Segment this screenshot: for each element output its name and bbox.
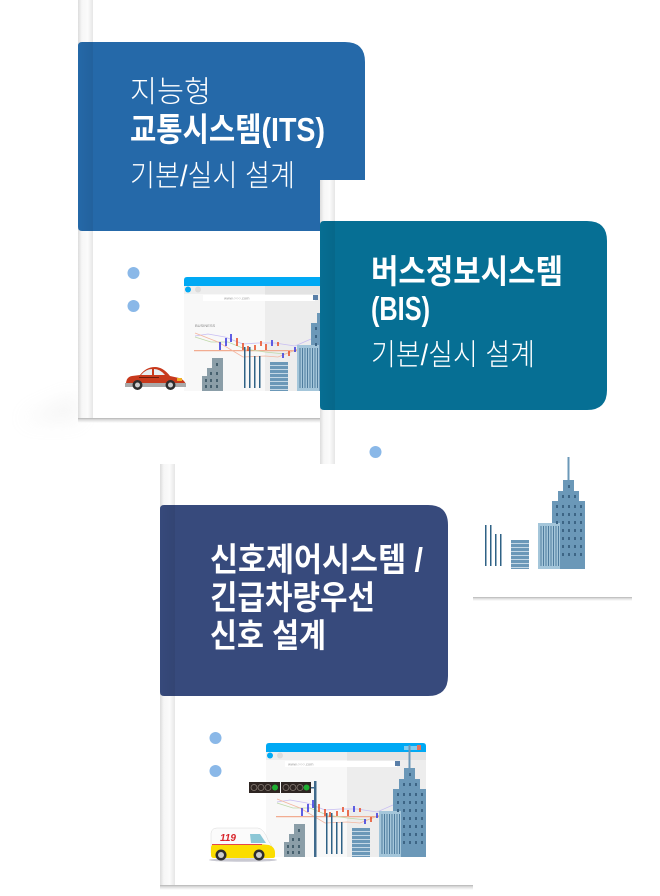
book 1 title <box>130 76 325 193</box>
book 1 panel spine shade <box>78 42 93 231</box>
book 3: signal control design <box>160 464 473 890</box>
icon: traffic signal <box>249 781 316 857</box>
book 3 spine <box>160 464 175 885</box>
book 2 panel spine shade <box>320 221 335 410</box>
book 1 title: 교통시스템(ITS) <box>130 111 325 148</box>
book 1 title: 지능형 <box>130 76 211 109</box>
book 3 page <box>160 464 473 885</box>
book 3 title: 긴급차량우선 <box>210 579 375 616</box>
book 2: BIS design <box>320 180 632 601</box>
book 2 spine <box>320 180 335 597</box>
book 3 bottom edge shadow <box>160 885 473 890</box>
book 2 title: 기본/실시 설계 <box>371 339 535 372</box>
book 1 browser illustration: www.○○○.com <box>224 296 250 300</box>
book 3 title <box>210 541 423 654</box>
book 3 browser illustration: www.○○○.com <box>288 762 314 766</box>
soft shadow behind first book <box>20 395 78 420</box>
icon: red car <box>125 367 186 390</box>
book 1 browser illustration: BUSINESS <box>195 323 216 328</box>
book 2 page <box>320 180 632 597</box>
book 3 bullet dots <box>210 732 222 777</box>
book 3 title panel <box>160 505 448 696</box>
book 1 title: 기본/실시 설계 <box>130 160 295 193</box>
book 3 browser illustration <box>266 743 426 857</box>
book 1 bullet dots <box>128 267 140 312</box>
book 2 title: (BIS) <box>371 290 430 327</box>
book 1: ITS design <box>78 0 365 423</box>
book 2 bottom edge shadow <box>320 597 632 601</box>
book 1 spine <box>78 0 93 418</box>
book 3 title: 신호제어시스템 / <box>210 541 423 578</box>
book 2 city illustration <box>443 457 585 569</box>
book 1 title panel <box>78 42 365 231</box>
book 1 page <box>78 0 320 418</box>
book 1 browser illustration <box>184 277 344 391</box>
book 3 panel spine shade <box>160 505 175 696</box>
icon: emergency van <box>209 828 277 862</box>
book 3 title: 신호 설계 <box>210 617 326 654</box>
book 2 title <box>371 253 563 372</box>
icon: emergency van: 119 <box>220 833 236 844</box>
book 2 title: 버스정보시스템 <box>371 253 563 290</box>
book 2 title panel <box>320 221 607 410</box>
book 1 bottom edge shadow <box>78 418 320 423</box>
book 2 bullet dot <box>370 446 382 458</box>
